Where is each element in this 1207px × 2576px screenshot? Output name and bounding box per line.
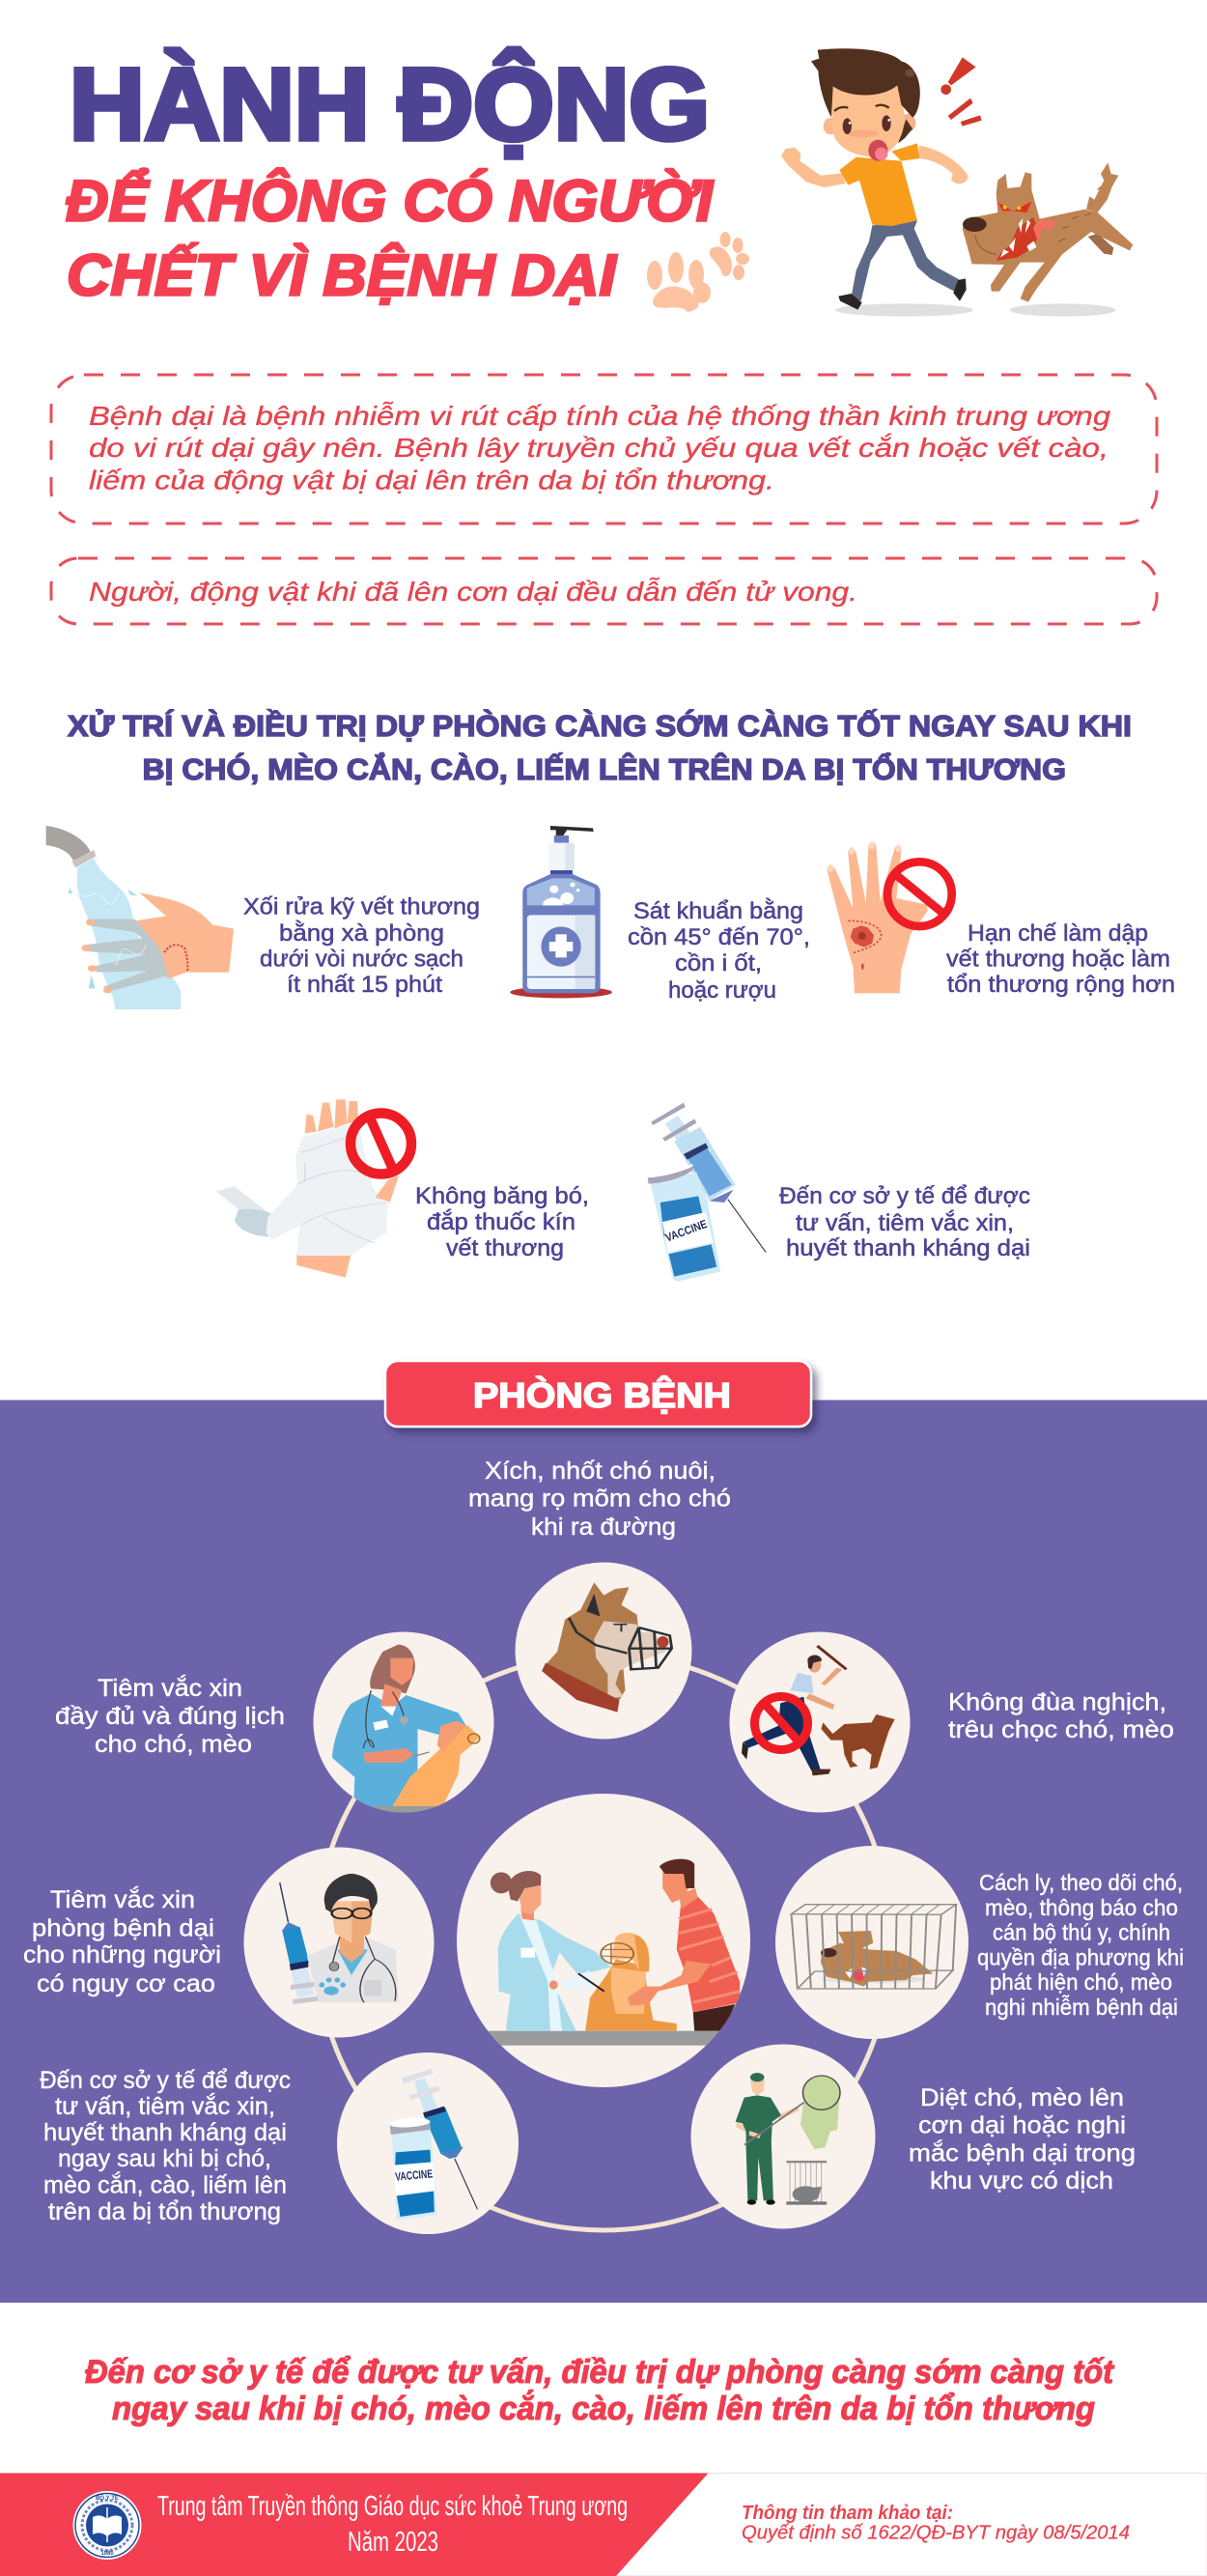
circle: vet, owner and muzzled dog — [457, 1794, 750, 2087]
text: disinfect — [628, 898, 810, 1004]
callout: definition of rabies — [51, 375, 1157, 524]
title line 1: HÀNH ĐỘNG — [70, 47, 710, 161]
callout: definition of rabies: Bệnh dại là bệnh nhiễm vi rút cấp tính của hệ thống thần kinh trung ương — [89, 401, 1110, 431]
text: isolate and monitor — [977, 1870, 1184, 2020]
circle: caged dog — [775, 1846, 968, 2039]
text: disinfect: Sát khuẩn bằng — [633, 898, 803, 924]
text: isolate and monitor: nghi nhiễm bệnh dại — [985, 1995, 1178, 2020]
text: vaccinate pets: Tiêm vắc xin — [98, 1674, 242, 1702]
text: vaccinate at-risk people: Tiêm vắc xin — [50, 1885, 195, 1913]
text: do not bandage: đắp thuốc kín — [427, 1209, 575, 1235]
text: avoid crushing wound: vết thương hoặc làm — [946, 947, 1170, 972]
text: do not bandage: vết thương — [446, 1235, 564, 1261]
organisation name — [157, 2491, 628, 2558]
reference: Quyết định số 1622/QĐ-BYT ngày 08/5/2014 — [742, 2523, 1130, 2544]
circle: vet vaccinating dog — [313, 1632, 494, 1814]
text: wash wound: bằng xà phòng — [279, 920, 444, 947]
callout: definition of rabies: liếm của động vật bị dại lên trên da bị tổn thương. — [89, 466, 774, 495]
callout: definition of rabies: do vi rút dại gây nên. Bệnh lây truyền chủ yếu qua vết cắn hoặc vết cào, — [89, 433, 1109, 463]
text: do not tease — [948, 1688, 1174, 1743]
text: seek medical advice after bite: trên da bị tổn thương — [48, 2198, 281, 2225]
panel: prevention — [0, 1361, 1207, 2303]
text: cull rabid animals: khu vực có dịch — [930, 2167, 1113, 2194]
footer red band — [0, 2473, 709, 2576]
title — [66, 47, 714, 307]
text: cull rabid animals — [909, 2084, 1136, 2194]
reference: Thông tin tham khảo tại: — [742, 2503, 953, 2524]
text: avoid crushing wound: tổn thương rộng hơn — [947, 972, 1175, 998]
text: vaccinate at-risk people: phòng bệnh dại — [32, 1914, 214, 1941]
circle: animal catcher with net and caged cat — [691, 2044, 875, 2229]
icon: antiseptic bottle — [510, 826, 612, 998]
text: do not tease: Không đùa nghịch, — [948, 1688, 1166, 1715]
text: vaccinate at-risk people: cho những người — [23, 1941, 221, 1968]
logo: 1980 — [100, 2551, 114, 2557]
text: avoid crushing wound: Hạn chế làm dập — [968, 920, 1148, 947]
callout: rabies is fatal — [51, 558, 1157, 624]
callout: rabies is fatal: Người, động vật khi đã lên cơn dại đều dẫn đến tử vong. — [89, 577, 857, 607]
text: cull rabid animals: cơn dại hoặc nghi — [918, 2111, 1126, 2138]
call to action — [85, 2354, 1115, 2427]
circle: do not tease dogs — [730, 1632, 910, 1812]
text: leash and muzzle — [468, 1458, 731, 1541]
icon: syringe and vaccine vial: VACCINE — [663, 1217, 709, 1245]
text: wash wound — [243, 894, 480, 998]
icon: bandaged hand with prohibition sign — [216, 1099, 411, 1278]
title line 3: CHẾT VÌ BỆNH DẠI — [67, 243, 617, 307]
icon: wounded hand with prohibition sign — [828, 841, 952, 993]
text: vaccinate pets: đầy đủ và đúng lịch — [55, 1703, 285, 1730]
text: isolate and monitor: phát hiện chó, mèo — [990, 1969, 1172, 1995]
text: vaccinate at-risk people — [23, 1885, 221, 1997]
text: isolate and monitor: quyền địa phương khi — [977, 1945, 1184, 1970]
text: isolate and monitor: Cách ly, theo dõi chó, — [979, 1870, 1183, 1895]
text: wash wound: Xối rửa kỹ vết thương — [243, 894, 480, 920]
text: seek medical advice after bite: Đến cơ sở y tế để được — [40, 2067, 291, 2094]
ring connecting circles — [316, 1655, 891, 2230]
footer — [0, 2473, 1207, 2576]
text: leash and muzzle: mang rọ mõm cho chó — [468, 1486, 731, 1513]
logo: BỘ Y TẾ — [96, 2494, 119, 2502]
text: avoid crushing wound — [946, 920, 1175, 998]
text: go to medical facility: huyết thanh kháng dại — [786, 1235, 1030, 1261]
heading button: prevention: PHÒNG BỆNH — [473, 1374, 731, 1415]
text: go to medical facility: tư vấn, tiêm vắc xin, — [796, 1210, 1014, 1236]
text: seek medical advice after bite: ngay sau khi bị chó, — [58, 2145, 271, 2172]
icon: washing hand under tap — [46, 826, 234, 1009]
heading: treatment: BỊ CHÓ, MÈO CẮN, CÀO, LIẾM LÊN TRÊN DA BỊ TỔN THƯƠNG — [143, 751, 1066, 786]
text: isolate and monitor: cán bộ thú y, chính — [993, 1920, 1170, 1945]
text: do not bandage — [415, 1183, 589, 1261]
text: leash and muzzle: Xích, nhốt chó nuôi, — [485, 1458, 716, 1485]
text: vaccinate pets — [55, 1674, 285, 1758]
call to action: Đến cơ sở y tế để được tư vấn, điều trị dự phòng càng sớm càng tốt — [85, 2354, 1115, 2391]
text: seek medical advice after bite: mèo cắn, cào, liếm lên — [43, 2171, 287, 2198]
heading button: prevention — [385, 1361, 811, 1427]
title line 2: ĐỂ KHÔNG CÓ NGƯỜI — [66, 168, 714, 234]
reference — [742, 2503, 1130, 2544]
circle: doctor with syringe — [243, 1847, 435, 2038]
text: vaccinate pets: cho chó, mèo — [95, 1731, 252, 1758]
text: seek medical advice after bite: tư vấn, tiêm vắc xin, — [55, 2092, 275, 2120]
text: disinfect: cồn i ốt, — [675, 950, 762, 977]
text: disinfect: cồn 45° đến 70°, — [628, 924, 810, 950]
illustration: man running from angry dog — [781, 48, 1133, 317]
text: leash and muzzle: khi ra đường — [531, 1514, 676, 1541]
circle: vaccine vial and syringe: VACCINE — [395, 2166, 434, 2184]
text: do not bandage: Không băng bó, — [415, 1183, 589, 1209]
text: seek medical advice after bite — [40, 2067, 291, 2225]
text: go to medical facility — [779, 1183, 1030, 1261]
text: seek medical advice after bite: huyết thanh kháng dại — [43, 2119, 287, 2146]
icon: paw prints — [647, 232, 749, 312]
circle: vaccine vial and syringe — [337, 2052, 519, 2234]
organisation name: Năm 2023 — [348, 2527, 438, 2558]
call to action: ngay sau khi bị chó, mèo cắn, cào, liếm lên trên da bị tổn thương — [112, 2391, 1095, 2427]
text: go to medical facility: Đến cơ sở y tế để được — [779, 1183, 1030, 1209]
heading: treatment: XỬ TRÍ VÀ ĐIỀU TRỊ DỰ PHÒNG CÀNG SỚM CÀNG TỐT NGAY SAU KHI — [68, 708, 1132, 743]
logo — [73, 2491, 141, 2560]
text: wash wound: dưới vòi nước sạch — [260, 947, 463, 972]
circle: muzzled dog — [516, 1563, 691, 1739]
organisation name: Trung tâm Truyền thông Giáo dục sức khoẻ Trung ương — [157, 2491, 628, 2522]
heading: treatment — [68, 708, 1132, 786]
text: disinfect: hoặc rượu — [668, 977, 776, 1004]
text: cull rabid animals: Diệt chó, mèo lên — [920, 2084, 1124, 2111]
icon: syringe and vaccine vial — [648, 1103, 766, 1282]
text: isolate and monitor: mèo, thông báo cho — [985, 1895, 1178, 1920]
text: vaccinate at-risk people: có nguy cơ cao — [37, 1970, 215, 1997]
text: cull rabid animals: mắc bệnh dại trong — [909, 2138, 1136, 2167]
text: do not tease: trêu chọc chó, mèo — [948, 1716, 1174, 1743]
text: wash wound: ít nhất 15 phút — [287, 972, 442, 998]
